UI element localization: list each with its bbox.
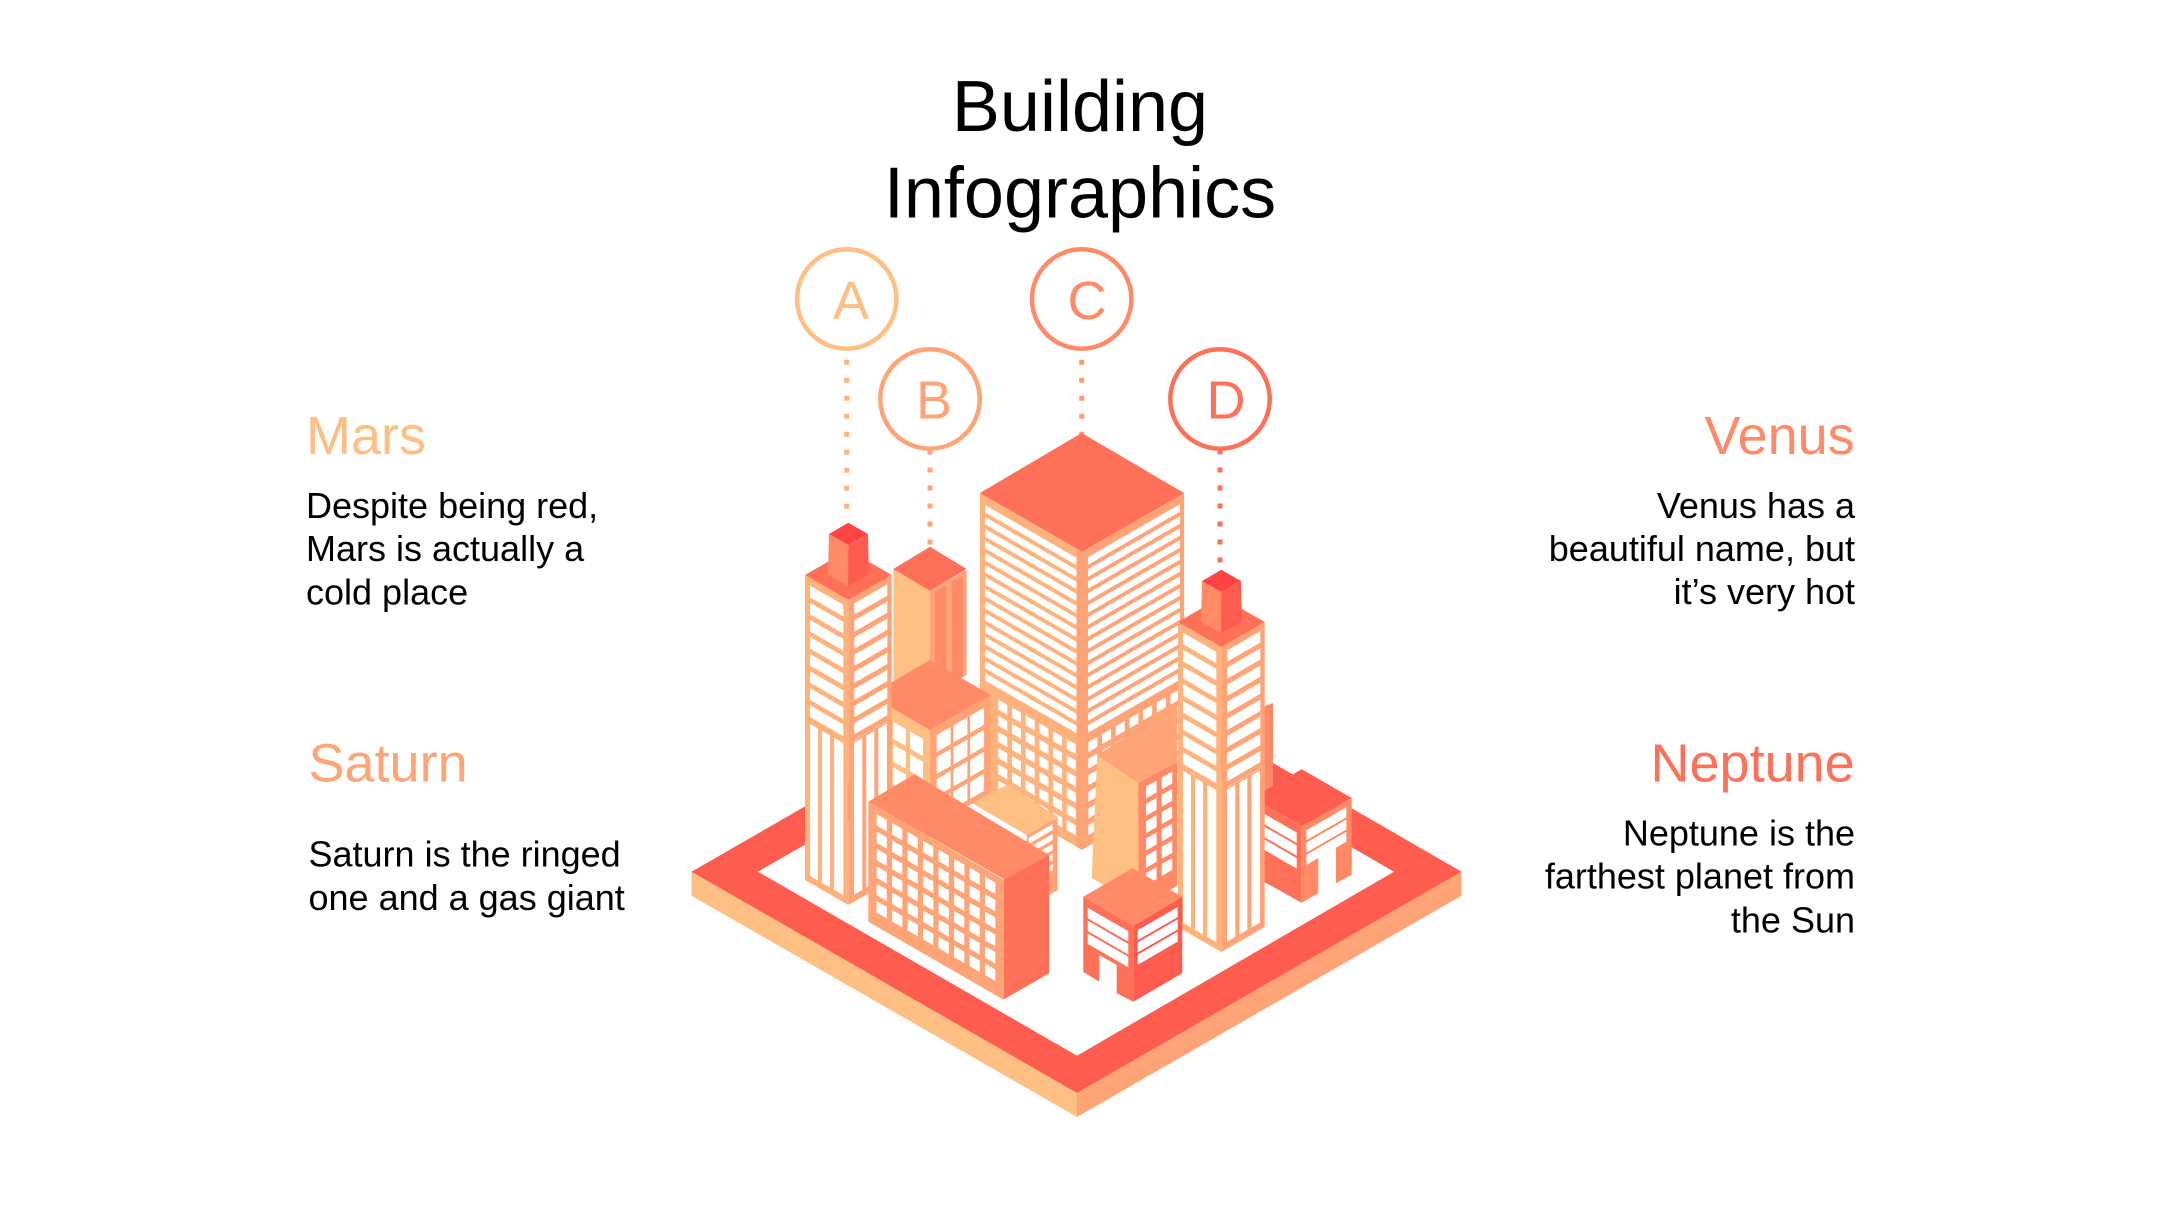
building: mid-rise with solid side, right of centre — [1092, 705, 1177, 908]
isometric city illustration — [692, 433, 1462, 1117]
marker D with dotted leader — [1170, 349, 1270, 563]
tower D with rooftop block — [1178, 570, 1265, 952]
building: right low block with red roof — [1252, 769, 1352, 903]
text block: Venus — [1549, 406, 1856, 612]
title: Infographics — [884, 154, 1276, 234]
building: mid-rise in front of B — [870, 660, 991, 840]
text block: Saturn: one and a gas giant — [308, 877, 625, 918]
marker A with dotted leader: A — [833, 271, 869, 331]
text block: Venus: Venus — [1705, 406, 1855, 466]
text block: Mars: Despite being red, — [306, 485, 598, 526]
marker B with dotted leader: B — [916, 370, 952, 430]
text block: Neptune: Neptune — [1651, 734, 1855, 794]
building C: central skyscraper — [980, 433, 1184, 850]
marker C with dotted leader: C — [1068, 271, 1106, 331]
text block: Mars: Mars is actually a — [306, 528, 585, 569]
text block: Neptune: the Sun — [1731, 900, 1855, 940]
text block: Venus: it’s very hot — [1674, 571, 1855, 612]
text block: Venus: Venus has a — [1657, 485, 1856, 526]
title: Building — [952, 67, 1208, 147]
tower A with rooftop block — [805, 523, 892, 905]
text block: Neptune: farthest planet from — [1545, 856, 1855, 896]
text block: Saturn: Saturn is the ringed — [308, 834, 621, 874]
text block: Neptune: Neptune is the — [1623, 812, 1855, 854]
marker A with dotted leader — [797, 249, 896, 509]
marker B with dotted leader — [880, 349, 980, 545]
text block: Mars: cold place — [306, 572, 468, 612]
marker C with dotted leader — [1032, 249, 1131, 436]
long low building, front left — [868, 774, 1049, 1000]
building: low block with pale roof — [972, 785, 1058, 908]
platform base — [692, 650, 1462, 1117]
text block: Mars: Mars — [306, 406, 426, 466]
marker D with dotted leader: D — [1206, 370, 1246, 430]
sliver of building behind tower D — [1260, 703, 1273, 795]
title — [884, 67, 1276, 234]
building B: rear tower — [893, 547, 967, 700]
small building, front centre — [1083, 868, 1182, 1002]
text block: Mars — [306, 406, 598, 612]
text block: Neptune — [1545, 734, 1855, 940]
text block: Venus: beautiful name, but — [1549, 528, 1855, 569]
text block: Saturn — [308, 734, 625, 918]
text block: Saturn: Saturn — [308, 734, 468, 794]
